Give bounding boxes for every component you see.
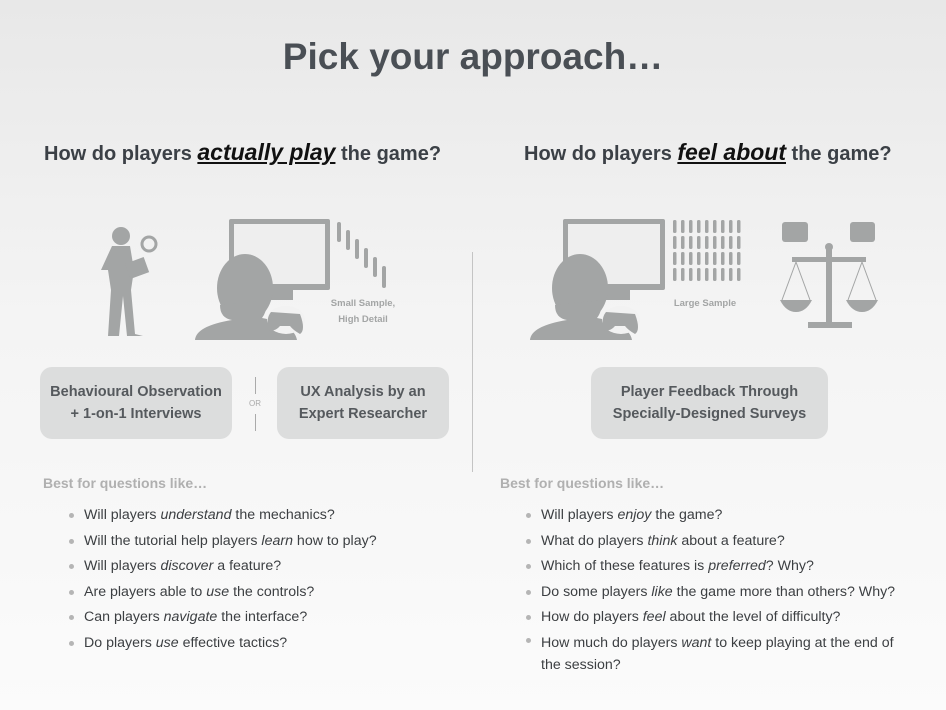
icon: researcher woman [101, 227, 156, 336]
icon: small sample people [337, 222, 386, 288]
OR separator: OR [249, 399, 261, 408]
list: left questions: Will players discover a feature? [84, 558, 281, 574]
box: UX analysis: Expert Researcher [299, 406, 427, 422]
box: player feedback: Specially-Designed Surveys [613, 406, 806, 422]
list: right questions: How much do players want to keep playing at the end of the session? [541, 634, 894, 672]
caption: small sample [331, 298, 395, 325]
list: right questions: How do players feel about the level of difficulty? [541, 609, 840, 625]
box: behavioural observation [40, 367, 232, 439]
title: Pick your approach… [283, 36, 663, 77]
caption: small sample: High Detail [338, 314, 388, 325]
box: UX analysis [277, 367, 449, 439]
caption: large sample: Large Sample [674, 298, 736, 309]
list: left questions: Will players understand the mechanics? [84, 507, 335, 523]
box: UX analysis: UX Analysis by an [300, 384, 426, 400]
list: left questions: Are players able to use the controls? [84, 584, 314, 600]
list: right questions: Will players enjoy the game? [541, 507, 722, 523]
heading: feel about: How do players feel about the game? [524, 139, 892, 165]
label: best for left: Best for questions like… [43, 475, 207, 491]
label: best for right: Best for questions like… [500, 475, 664, 491]
list: left questions: Can players navigate the interface? [84, 609, 307, 625]
list: right questions: What do players think about a feature? [541, 532, 785, 548]
box: behavioural observation: Behavioural Observation [50, 384, 222, 400]
box: player feedback: Player Feedback Through [621, 384, 798, 400]
heading: actually play: How do players actually play the game? [44, 139, 441, 165]
list: left questions [69, 507, 377, 650]
box: player feedback [591, 367, 828, 439]
icon: large sample grid [673, 220, 740, 281]
caption: small sample: Small Sample, [331, 298, 395, 309]
icon: monitor with player right [530, 219, 665, 340]
list: left questions: Do players use effective tactics? [84, 634, 287, 650]
list: right questions: Do some players like the game more than others? Why? [541, 584, 895, 600]
icon: scale with thumbs [780, 222, 878, 328]
box: behavioural observation: + 1-on-1 Interviews [71, 406, 201, 422]
list: right questions [526, 507, 895, 672]
icons: illustrations [101, 219, 878, 340]
icon: monitor with player [195, 219, 330, 340]
list: left questions: Will the tutorial help players learn how to play? [84, 532, 377, 548]
list: right questions: Which of these features is preferred? Why? [541, 558, 814, 574]
